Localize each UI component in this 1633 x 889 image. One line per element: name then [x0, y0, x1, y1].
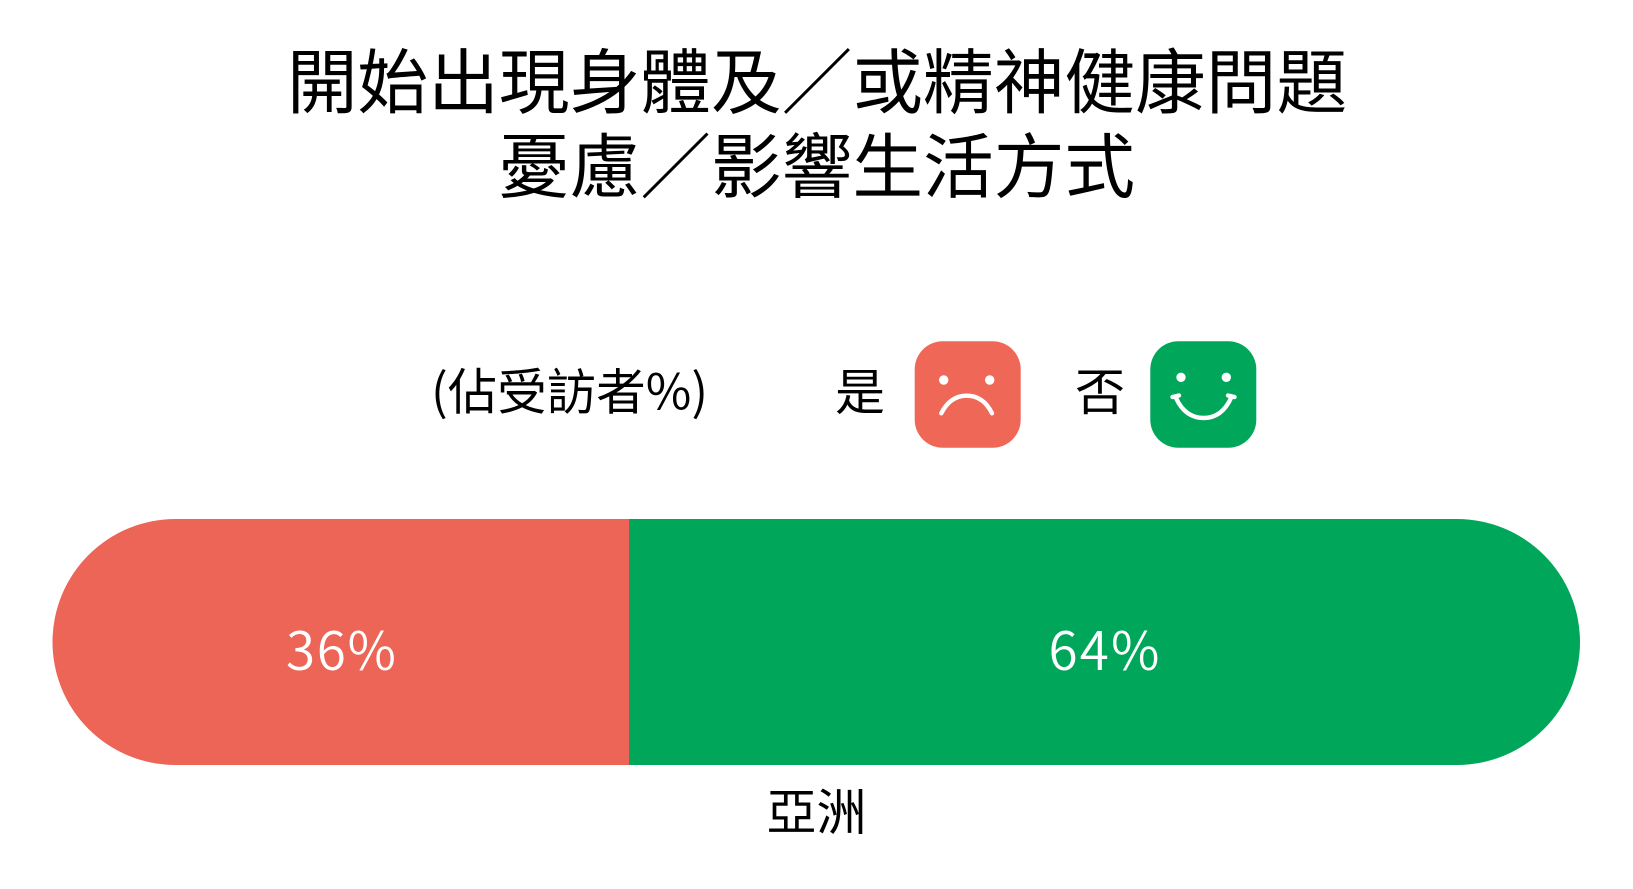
title: 開始出現身體及／或精神健康問題 [287, 26, 1347, 128]
bar segment: no 64% [629, 519, 1580, 765]
legend note: share of respondents: (佔受訪者%) [431, 354, 708, 424]
legend [431, 341, 1256, 448]
bar segment: yes 36%: 36% [286, 610, 396, 686]
bar segment: yes 36% [52, 519, 629, 765]
legend label: yes: 是 [835, 353, 885, 425]
title: 憂慮／影響生活方式 [499, 111, 1135, 213]
title [287, 26, 1347, 213]
bar label: Asia: 亞洲 [766, 773, 866, 845]
icon: happy face [1150, 341, 1256, 448]
bar segment: no 64%: 64% [1048, 610, 1160, 686]
legend label: no: 否 [1075, 353, 1125, 425]
icon: sad face [915, 341, 1021, 448]
stacked bar chart: Asia [52, 519, 1580, 765]
